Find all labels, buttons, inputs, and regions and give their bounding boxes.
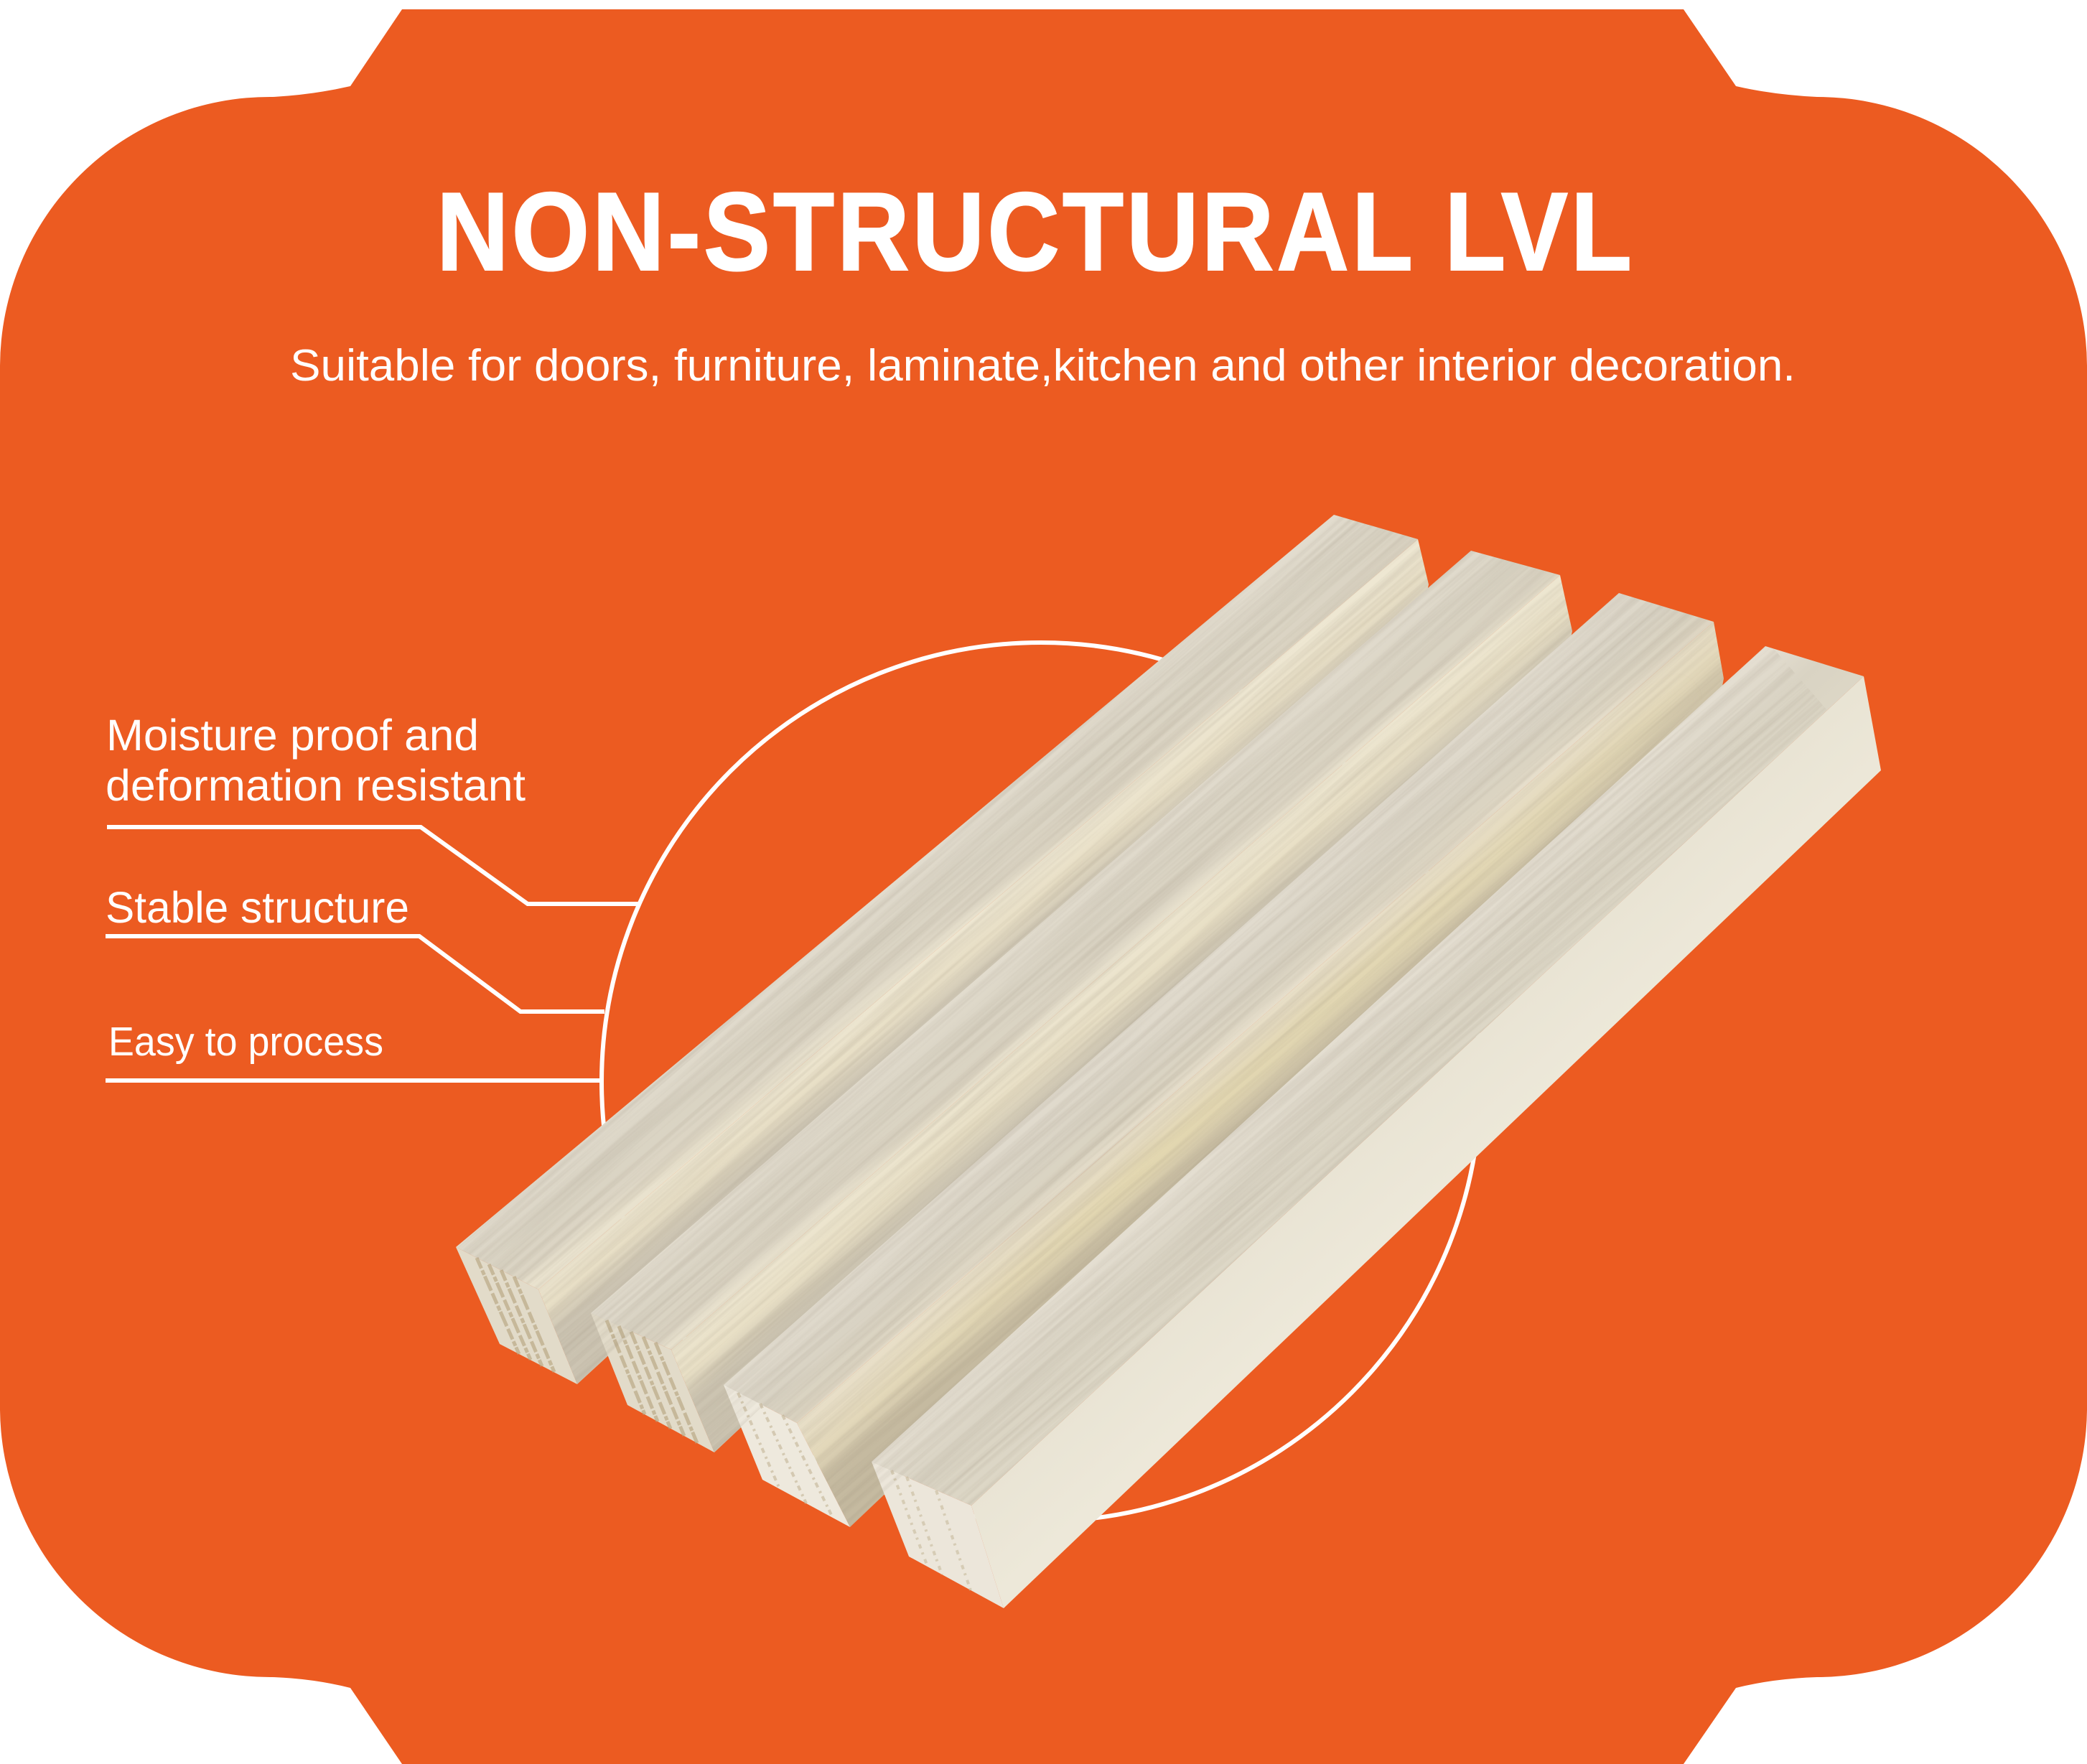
callout: moisture proof and deformation resistant: Moisture proof and — [106, 711, 479, 760]
callout: stable structure: Stable structure — [106, 883, 409, 932]
title: NON-STRUCTURAL LVL — [436, 170, 1632, 294]
board 4 — [872, 646, 1881, 1608]
white circle outline behind boards — [602, 643, 1480, 1521]
callout: moisture proof and deformation resistant — [106, 711, 639, 904]
board 3 — [724, 593, 1724, 1527]
subtitle: Suitable for doors, furniture, laminate,kitchen and other interior decoration. — [290, 341, 1796, 391]
wood grain overlay — [464, 517, 1825, 1505]
board 2 — [591, 551, 1572, 1452]
board 1 — [456, 515, 1429, 1384]
callout: easy to process: Easy to process — [108, 1019, 383, 1065]
callout: stable structure — [106, 883, 604, 1012]
LVL wood boards — [456, 515, 1881, 1608]
callout: moisture proof and deformation resistant: deformation resistant — [106, 761, 526, 810]
